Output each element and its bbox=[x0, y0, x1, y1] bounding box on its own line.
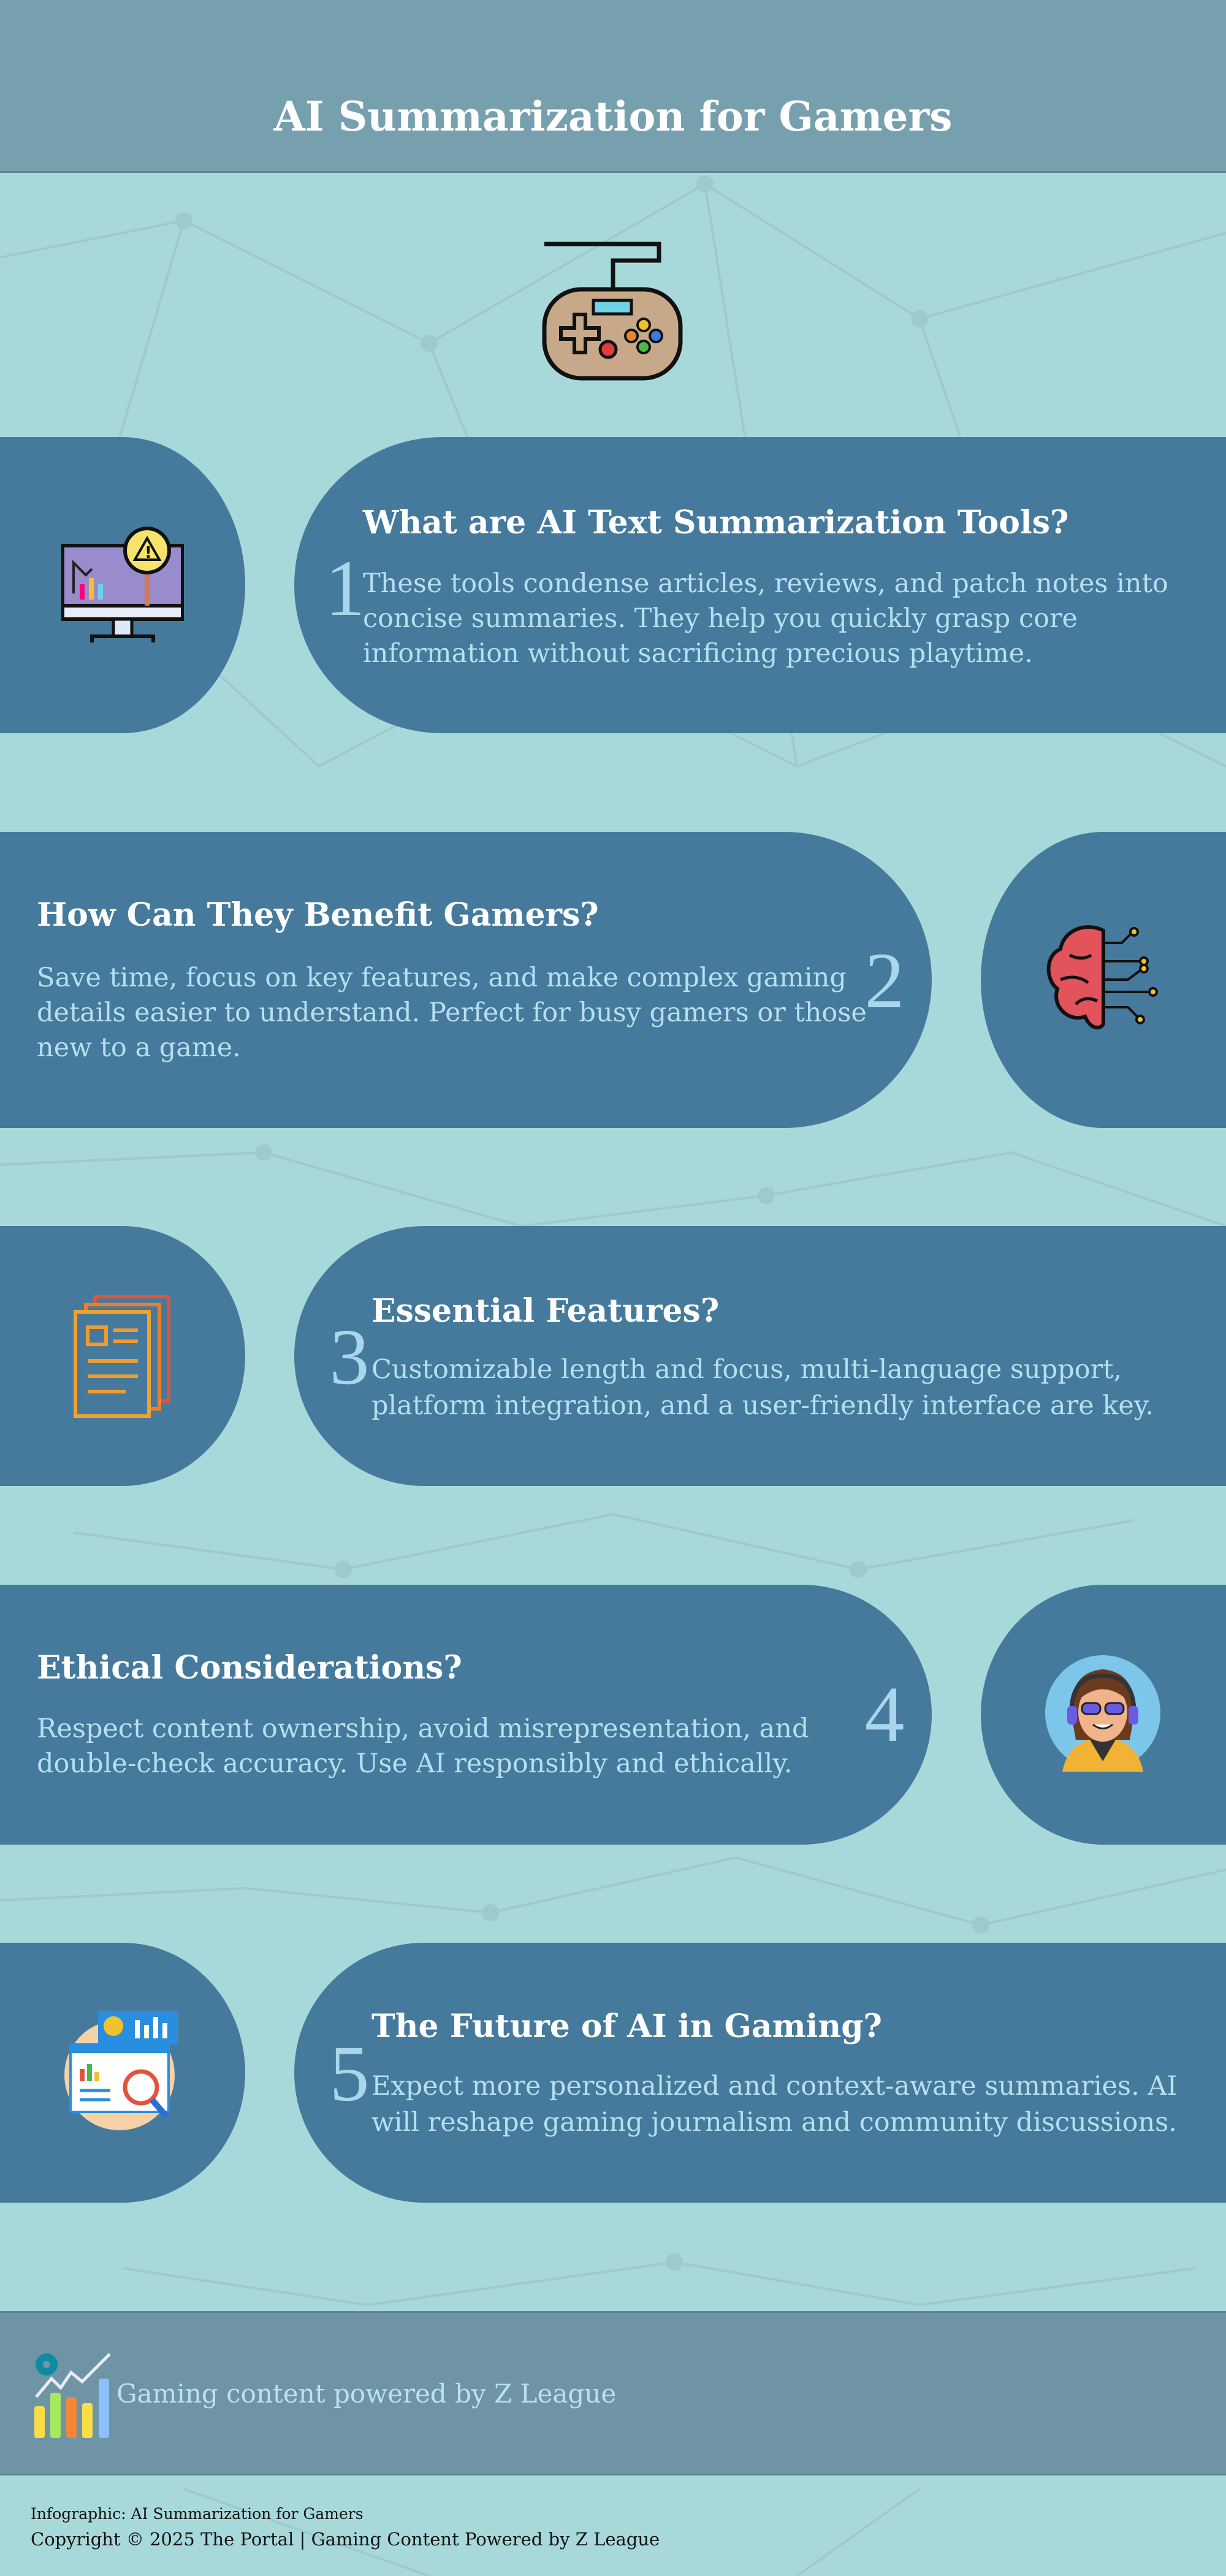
icon: growth chart bbox=[34, 2353, 111, 2438]
body 1: information without sacrificing precious playtime. bbox=[363, 638, 1033, 669]
body 4: Respect content ownership, avoid misrepresentation, and bbox=[37, 1713, 809, 1744]
number 2: 2 bbox=[864, 937, 905, 1025]
body 3 bbox=[371, 1354, 1154, 1421]
heading 2: How Can They Benefit Gamers? bbox=[37, 896, 599, 934]
pill 5 bbox=[294, 1943, 1226, 2203]
body 5: will reshape gaming journalism and community discussions. bbox=[371, 2107, 1177, 2138]
credit text: Infographic: AI Summarization for Gamers bbox=[31, 2505, 364, 2523]
icon: analytics dashboard bbox=[64, 2011, 178, 2130]
panel 2: benefits bbox=[0, 832, 1226, 1128]
body 4 bbox=[37, 1713, 809, 1779]
panel 3: features bbox=[0, 1226, 1226, 1486]
title: AI Summarization for Gamers bbox=[274, 93, 952, 140]
body 2: details easier to understand. Perfect for busy gamers or those bbox=[37, 997, 867, 1028]
icon circle 2 bbox=[981, 832, 1226, 1128]
number 4: 4 bbox=[864, 1671, 905, 1759]
icon: monitor warning: ! bbox=[145, 544, 152, 562]
number 5: 5 bbox=[330, 2030, 369, 2118]
heading 1: What are AI Text Summarization Tools? bbox=[363, 504, 1068, 541]
body 1: These tools condense articles, reviews, and patch notes into bbox=[363, 568, 1168, 599]
credit text bbox=[31, 2505, 660, 2550]
heading 3: Essential Features? bbox=[371, 1292, 719, 1330]
icon: gamer avatar bbox=[1045, 1655, 1160, 1772]
pill 3 bbox=[294, 1226, 1226, 1486]
credit text: Copyright © 2025 The Portal | Gaming Content Powered by Z League bbox=[31, 2529, 660, 2550]
body 4: double-check accuracy. Use AI responsibly and ethically. bbox=[37, 1748, 793, 1779]
body 1: concise summaries. They help you quickly grasp core bbox=[363, 603, 1078, 634]
pill 4 bbox=[0, 1585, 932, 1845]
body 5 bbox=[371, 2071, 1177, 2138]
icon circle 1 bbox=[0, 437, 245, 733]
icon: documents bbox=[74, 1295, 170, 1418]
icon: monitor warning bbox=[61, 527, 184, 642]
icon circle 5 bbox=[0, 1943, 245, 2203]
icon circle 3 bbox=[0, 1226, 245, 1486]
body 2: Save time, focus on key features, and make complex gaming bbox=[37, 962, 847, 993]
body 2 bbox=[37, 962, 867, 1063]
pill 1 bbox=[294, 437, 1226, 733]
panel 5: future bbox=[0, 1943, 1226, 2203]
panel 4: ethics bbox=[0, 1585, 1226, 1845]
number 3: 3 bbox=[330, 1313, 369, 1401]
footer tagline: Gaming content powered by Z League bbox=[116, 2379, 616, 2409]
heading 5: The Future of AI in Gaming? bbox=[371, 2008, 882, 2045]
footer band bbox=[0, 2311, 1226, 2475]
icon: brain bbox=[1047, 925, 1158, 1030]
body 2: new to a game. bbox=[37, 1032, 241, 1063]
panel 1: what are tools bbox=[0, 437, 1226, 733]
header band bbox=[0, 0, 1226, 173]
number 1: 1 bbox=[325, 544, 365, 633]
body 3: Customizable length and focus, multi-language support, bbox=[371, 1354, 1122, 1385]
pill 2 bbox=[0, 832, 932, 1128]
body 1 bbox=[363, 568, 1168, 669]
icon: game controller bbox=[542, 242, 683, 380]
icon circle 4 bbox=[981, 1585, 1226, 1845]
body 5: Expect more personalized and context-aware summaries. AI bbox=[371, 2071, 1177, 2102]
heading 4: Ethical Considerations? bbox=[37, 1649, 462, 1686]
body 3: platform integration, and a user-friendly interface are key. bbox=[371, 1390, 1154, 1421]
